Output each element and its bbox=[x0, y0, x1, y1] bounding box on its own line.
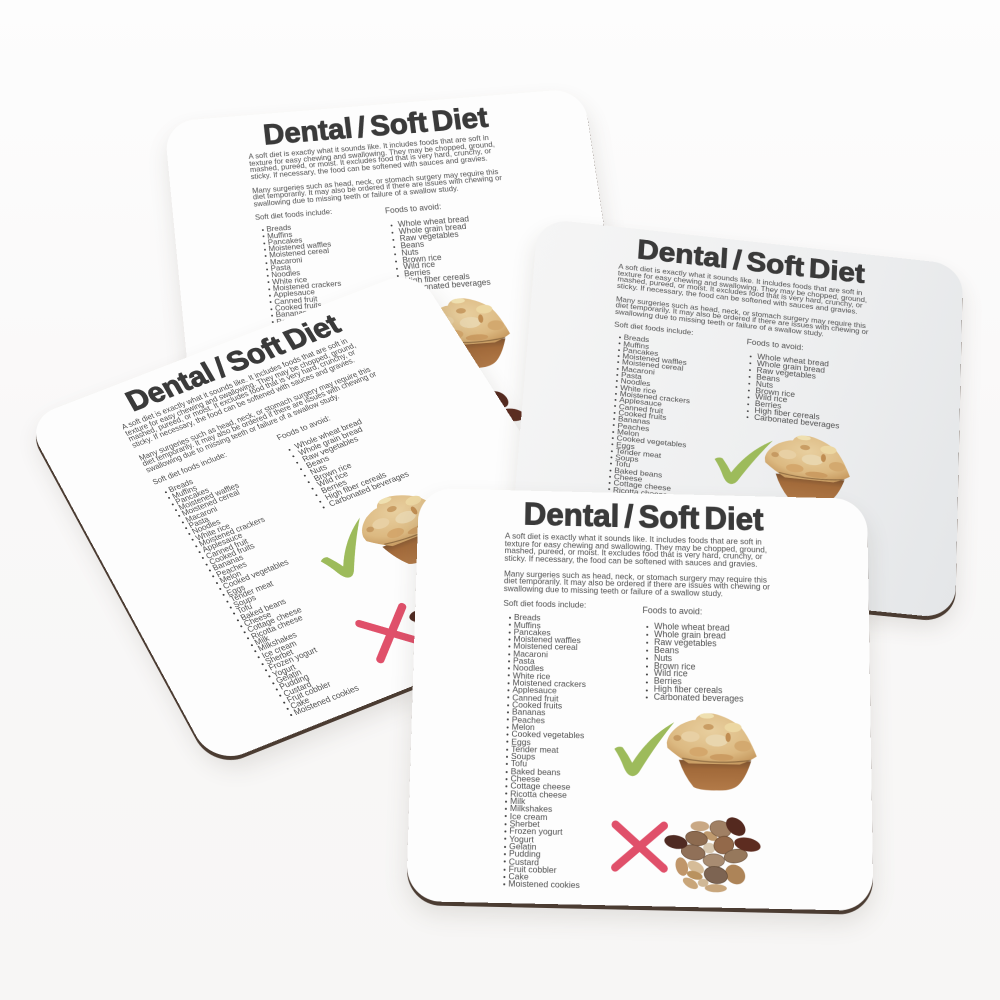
back coaster soft foods list: Cooked fruits bbox=[275, 300, 322, 313]
right coaster soft foods list: Tofu bbox=[615, 459, 631, 469]
icon: muffin bbox=[666, 713, 757, 791]
front coaster soft foods list: Baked beans bbox=[511, 766, 561, 777]
right coaster avoid list: Raw vegetables bbox=[756, 365, 816, 380]
front coaster cork edge bbox=[406, 492, 874, 915]
back coaster soft foods list: Breads bbox=[266, 223, 292, 234]
front coaster soft foods list: Macaroni bbox=[513, 648, 548, 659]
front coaster intro paragraph: sticky. If necessary, the food can be softened with sauces and gravies. bbox=[504, 553, 758, 568]
back coaster soft foods list: Moistened cookies bbox=[292, 462, 360, 476]
front coaster soft foods list: Pudding bbox=[509, 848, 541, 859]
icon: red cross bbox=[381, 400, 440, 451]
icon: green check bbox=[614, 722, 674, 776]
back coaster soft foods list: Pancakes bbox=[267, 235, 303, 247]
left coaster second paragraph: swallowing due to missing teeth or failure of a swallow study. bbox=[144, 391, 341, 474]
front coaster soft foods list: Cooked vegetables bbox=[511, 729, 584, 741]
coaster: back bbox=[163, 101, 610, 476]
left coaster soft foods list: Yogurt bbox=[270, 662, 297, 679]
front coaster soft foods list: Yogurt bbox=[509, 833, 534, 844]
left coaster avoid list: High fiber cereals bbox=[323, 470, 388, 502]
right coaster avoid list: Berries bbox=[755, 399, 782, 411]
front coaster soft foods list: Moistened cookies bbox=[508, 879, 580, 891]
left coaster soft foods list: Ricotta cheese bbox=[249, 612, 304, 641]
right coaster soft foods list: Milk bbox=[612, 491, 628, 502]
left coaster soft foods list: Cooked vegetables bbox=[221, 557, 290, 591]
front coaster soft foods list: Pancakes bbox=[514, 627, 551, 637]
back coaster second paragraph: Many surgeries such as head, neck, or stomach surgery may require this bbox=[252, 167, 499, 195]
right coaster cork edge bbox=[508, 222, 963, 623]
front coaster soft foods list: Cake bbox=[508, 871, 529, 882]
back coaster soft foods list: White rice bbox=[272, 274, 308, 286]
front coaster avoid list: Wild rice bbox=[654, 668, 688, 679]
back coaster soft foods list: Cheese bbox=[282, 369, 310, 380]
left coaster soft foods heading: Soft diet foods include: bbox=[151, 450, 228, 487]
back coaster soft foods list: Ricotta cheese bbox=[283, 380, 337, 393]
right coaster soft foods list: Tender meat bbox=[615, 446, 661, 460]
back coaster soft foods list: Sherbet bbox=[286, 409, 315, 421]
back coaster soft foods list: Custard bbox=[290, 444, 319, 455]
left coaster soft foods list: Moistened waffles bbox=[177, 481, 241, 512]
left coaster second paragraph: Many surgeries such as head, neck, or stomach surgery may require this bbox=[137, 365, 372, 462]
right coaster title: Dental / Soft Diet bbox=[636, 234, 865, 288]
right coaster soft foods list: Frozen yogurt bbox=[610, 517, 662, 531]
back coaster soft foods list: Milk bbox=[284, 390, 299, 400]
front coaster soft foods list: Applesauce bbox=[512, 685, 557, 696]
front coaster soft foods list: Cooked fruits bbox=[512, 699, 562, 711]
front coaster soft foods list: Tofu bbox=[511, 758, 527, 769]
front coaster avoid list: High fiber cereals bbox=[654, 684, 722, 696]
front coaster soft foods list: Cheese bbox=[510, 773, 540, 784]
back coaster intro paragraph: mashed, pureed, or moist. It excludes food that is very hard, crunchy, or bbox=[249, 146, 492, 174]
icon: red cross bbox=[611, 820, 668, 873]
front coaster soft foods list: Bananas bbox=[512, 707, 546, 717]
back coaster soft foods list: Macaroni bbox=[270, 255, 303, 266]
back coaster soft foods list: Cottage cheese bbox=[282, 373, 339, 387]
left coaster soft foods list: Custard bbox=[281, 679, 313, 698]
back coaster avoid list bbox=[390, 214, 491, 293]
front coaster soft foods list: Tender meat bbox=[511, 744, 559, 755]
back coaster avoid list: Raw vegetables bbox=[399, 229, 459, 243]
left coaster soft foods list: Milkshakes bbox=[256, 630, 299, 654]
right coaster avoid list bbox=[746, 352, 840, 431]
front coaster printed face bbox=[406, 488, 874, 911]
front coaster avoid heading: Foods to avoid: bbox=[642, 605, 702, 617]
left coaster soft foods list: Bananas bbox=[211, 553, 245, 573]
coaster: front bbox=[401, 490, 879, 929]
left coaster avoid list: Raw vegetables bbox=[300, 434, 360, 463]
right coaster soft foods list: Pasta bbox=[621, 370, 642, 381]
right coaster avoid heading: Foods to avoid: bbox=[747, 338, 804, 352]
back coaster avoid heading: Foods to avoid: bbox=[385, 202, 442, 215]
front coaster avoid list: Nuts bbox=[654, 652, 672, 663]
left coaster avoid list: Carbonated beverages bbox=[327, 469, 411, 509]
right coaster avoid list: Beans bbox=[756, 372, 780, 383]
front coaster soft foods list: Fruit cobbler bbox=[509, 863, 557, 875]
icon: nuts bbox=[494, 390, 522, 422]
back coaster soft foods list: Moistened crackers bbox=[272, 279, 342, 293]
front coaster avoid list: Carbonated beverages bbox=[654, 692, 743, 704]
back coaster soft foods list: Yogurt bbox=[288, 423, 312, 434]
icon: green check bbox=[372, 309, 434, 363]
right coaster soft foods list: Pancakes bbox=[623, 345, 659, 358]
front coaster soft foods list: Milk bbox=[510, 796, 525, 806]
back coaster soft foods list: Tender meat bbox=[279, 340, 324, 353]
right coaster soft foods list: Milkshakes bbox=[612, 498, 653, 511]
right coaster avoid list: Whole grain bread bbox=[757, 359, 825, 374]
back coaster avoid list: Nuts bbox=[401, 247, 419, 257]
front coaster soft foods list: Milkshakes bbox=[510, 803, 552, 814]
left coaster avoid list: Berries bbox=[319, 478, 349, 496]
back coaster intro paragraph: texture for easy chewing and swallowing. They may be chopped, ground, bbox=[249, 139, 495, 167]
left coaster soft foods list: Eggs bbox=[225, 582, 247, 597]
right coaster intro paragraph: texture for easy chewing and swallowing. They may be chopped, ground, bbox=[618, 268, 867, 304]
left coaster avoid list: Whole grain bread bbox=[296, 424, 364, 457]
left coaster soft foods list: Noodles bbox=[190, 517, 222, 536]
back coaster soft foods list: Moistened cereal bbox=[269, 246, 329, 260]
right coaster soft foods list: Breads bbox=[623, 333, 650, 344]
back coaster title: Dental / Soft Diet bbox=[262, 101, 490, 150]
left coaster soft foods list: White rice bbox=[194, 521, 232, 542]
icon: red cross bbox=[355, 602, 414, 664]
right coaster soft foods list: Muffins bbox=[623, 339, 649, 350]
back coaster soft foods list: Pasta bbox=[270, 262, 291, 273]
back coaster printed face bbox=[164, 88, 640, 495]
right coaster soft foods list: Macaroni bbox=[621, 364, 655, 376]
right coaster intro paragraph: sticky. If necessary, the food can be softened with sauces and gravies. bbox=[617, 281, 858, 315]
right coaster soft foods list: Eggs bbox=[616, 440, 635, 451]
back coaster soft foods list: Pudding bbox=[289, 437, 320, 448]
right coaster soft foods list: Moistened waffles bbox=[622, 352, 687, 367]
left coaster avoid list: Nuts bbox=[308, 462, 329, 476]
back coaster intro paragraph: sticky. If necessary, the food can be softened with sauces and gravies. bbox=[250, 153, 488, 181]
icon: muffin bbox=[441, 298, 510, 368]
left coaster second paragraph: diet temporarily. It may also be ordered if there are issues with chewing or bbox=[140, 370, 378, 468]
left coaster intro paragraph: mashed, pureed, or moist. It excludes food that is very hard, crunchy, or bbox=[127, 348, 357, 443]
back coaster soft foods list: Cake bbox=[291, 458, 311, 469]
right coaster second paragraph: swallowing due to missing teeth or failure of a swallow study. bbox=[615, 307, 824, 338]
back coaster cork edge bbox=[165, 92, 641, 499]
front coaster soft foods list: Peaches bbox=[512, 714, 545, 725]
left coaster soft foods list: Applesauce bbox=[200, 531, 244, 554]
left coaster soft foods list: Baked beans bbox=[238, 596, 288, 622]
left coaster soft foods list: Soups bbox=[232, 593, 258, 610]
left coaster soft foods list: Moistened cereal bbox=[180, 488, 241, 518]
right coaster soft foods list: Noodles bbox=[620, 377, 651, 388]
right coaster soft foods list: Moistened cereal bbox=[622, 358, 684, 373]
front coaster soft foods list bbox=[503, 612, 586, 891]
right coaster soft foods list: Peaches bbox=[617, 421, 650, 433]
right coaster avoid list: Nuts bbox=[756, 379, 773, 389]
coaster: left rotated bbox=[36, 278, 520, 772]
left coaster soft foods list: Muffins bbox=[170, 483, 198, 500]
right coaster soft foods list: Canned fruit bbox=[619, 402, 663, 415]
icon: nuts bbox=[664, 817, 761, 892]
front coaster soft foods list: Cottage cheese bbox=[510, 781, 570, 792]
left coaster soft foods list: Cake bbox=[288, 695, 311, 711]
right coaster avoid list: Brown rice bbox=[755, 386, 795, 398]
back coaster soft foods list: Applesauce bbox=[273, 287, 315, 299]
right coaster avoid list: Carbonated beverages bbox=[754, 413, 840, 431]
front coaster title: Dental / Soft Diet bbox=[523, 496, 764, 537]
right coaster second paragraph: diet temporarily. It may also be ordered if there are issues with chewing or bbox=[615, 301, 869, 336]
front coaster soft foods list: White rice bbox=[513, 670, 550, 681]
front coaster intro paragraph bbox=[504, 531, 767, 568]
back coaster soft foods list: Baked beans bbox=[281, 360, 328, 373]
front coaster second paragraph: swallowing due to missing teeth or failure of a swallow study. bbox=[504, 583, 723, 598]
left coaster avoid list: Brown rice bbox=[312, 460, 353, 483]
front coaster avoid list bbox=[646, 621, 744, 704]
right coaster soft foods list: Cheese bbox=[614, 472, 643, 484]
left coaster printed face bbox=[25, 269, 628, 766]
back coaster second paragraph bbox=[252, 167, 503, 208]
left coaster avoid list: Wild rice bbox=[315, 469, 350, 489]
front coaster soft foods heading: Soft diet foods include: bbox=[503, 598, 586, 610]
icon: nuts bbox=[757, 520, 851, 595]
right coaster avoid list: Whole wheat bread bbox=[757, 352, 829, 368]
front coaster avoid list: Whole grain bread bbox=[654, 629, 726, 640]
back coaster soft foods list: Muffins bbox=[267, 229, 293, 240]
back coaster intro paragraph bbox=[248, 133, 495, 181]
front coaster soft foods list: Breads bbox=[514, 612, 541, 623]
icon: red cross bbox=[707, 520, 763, 570]
icon: muffin bbox=[362, 495, 426, 564]
left coaster soft foods list: Moistened crackers bbox=[197, 515, 267, 548]
right coaster soft foods list: Custard bbox=[609, 544, 638, 555]
front coaster avoid list: Whole wheat bread bbox=[654, 621, 730, 633]
back coaster soft foods list: Bananas bbox=[275, 308, 307, 319]
left coaster soft foods list: Fruit cobbler bbox=[285, 679, 332, 705]
front coaster soft foods list: Soups bbox=[511, 751, 535, 762]
right coaster avoid list: Wild rice bbox=[755, 393, 787, 404]
front coaster avoid list: Raw vegetables bbox=[654, 637, 717, 648]
right coaster intro paragraph bbox=[617, 262, 867, 315]
front coaster soft foods list: Custard bbox=[509, 856, 539, 867]
left coaster soft foods list: Cheese bbox=[242, 609, 273, 628]
left coaster intro paragraph: texture for easy chewing and swallowing. They may be chopped, ground, bbox=[123, 340, 357, 437]
right coaster soft foods list: White rice bbox=[620, 383, 657, 395]
front coaster soft foods list: Gelatin bbox=[509, 841, 536, 852]
back coaster soft foods list: Noodles bbox=[271, 268, 301, 279]
left coaster avoid list: Beans bbox=[304, 453, 331, 470]
left coaster avoid list: Whole wheat bread bbox=[293, 417, 364, 451]
right coaster soft foods heading: Soft diet foods include: bbox=[614, 320, 694, 337]
right coaster intro paragraph: A soft diet is exactly what it sounds like. It includes foods that are soft in bbox=[618, 262, 863, 297]
back coaster soft foods list: Peaches bbox=[276, 315, 308, 326]
left coaster soft foods list: Cottage cheese bbox=[246, 605, 304, 635]
left coaster soft foods list: Milk bbox=[253, 633, 271, 647]
right coaster soft foods list: Cottage cheese bbox=[613, 478, 671, 493]
right coaster soft foods list: Yogurt bbox=[610, 524, 634, 535]
back coaster second paragraph: swallowing due to missing teeth or failure of a swallow study. bbox=[253, 183, 459, 208]
right coaster soft foods list: Soups bbox=[615, 453, 639, 464]
right coaster soft foods list: Fruit cobbler bbox=[608, 550, 655, 564]
right coaster soft foods list: Moistened crackers bbox=[620, 389, 690, 405]
left coaster soft foods list: Pancakes bbox=[173, 485, 211, 506]
front coaster soft foods list: Muffins bbox=[514, 619, 541, 630]
back coaster soft foods list: Canned fruit bbox=[274, 294, 318, 306]
right coaster soft foods list: Baked beans bbox=[614, 465, 662, 479]
right coaster soft foods list bbox=[607, 333, 690, 579]
front coaster soft foods list: Pasta bbox=[513, 656, 535, 666]
left coaster soft foods list: Macaroni bbox=[184, 504, 219, 524]
back coaster soft foods list: Tofu bbox=[280, 356, 296, 366]
front coaster second paragraph: Many surgeries such as head, neck, or stomach surgery may require this bbox=[504, 568, 767, 584]
left coaster title: Dental / Soft Diet bbox=[120, 308, 346, 417]
front coaster soft foods list: Ricotta cheese bbox=[510, 788, 567, 800]
front coaster intro paragraph: A soft diet is exactly what it sounds like. It includes foods that are soft in bbox=[505, 531, 762, 547]
back coaster avoid list: Brown rice bbox=[402, 252, 442, 264]
left coaster soft foods list: Sherbet bbox=[263, 647, 295, 666]
right coaster soft foods list: Cooked vegetables bbox=[616, 433, 687, 449]
left coaster soft foods list: Tender meat bbox=[228, 578, 275, 603]
icon: green check bbox=[714, 440, 773, 484]
right coaster soft foods list: Bananas bbox=[618, 414, 650, 426]
back coaster soft foods heading: Soft diet foods include: bbox=[255, 207, 333, 222]
front coaster soft foods list: Ice cream bbox=[510, 811, 548, 822]
right coaster second paragraph: Many surgeries such as head, neck, or stomach surgery may require this bbox=[616, 294, 866, 330]
left coaster soft foods list: Gelatin bbox=[274, 667, 303, 685]
back coaster soft foods list bbox=[262, 223, 360, 476]
left coaster soft foods list: Melon bbox=[218, 568, 243, 585]
right coaster soft foods list: Moistened cookies bbox=[607, 563, 676, 579]
right coaster printed face bbox=[508, 218, 963, 619]
left coaster avoid heading: Foods to avoid: bbox=[275, 414, 332, 442]
right coaster soft foods list: Cake bbox=[608, 557, 628, 568]
front coaster avoid list: Beans bbox=[654, 645, 679, 655]
front coaster avoid list: Brown rice bbox=[654, 660, 696, 671]
icon: muffin bbox=[764, 435, 850, 498]
left coaster soft foods list: Peaches bbox=[214, 559, 248, 579]
front coaster soft foods list: Moistened crackers bbox=[512, 677, 586, 689]
left coaster soft foods list: Pudding bbox=[278, 672, 311, 692]
back coaster avoid list: Berries bbox=[404, 268, 431, 279]
left coaster soft foods list: Breads bbox=[167, 477, 195, 494]
front coaster intro paragraph: mashed, pureed, or moist. It excludes food that is very hard, crunchy, or bbox=[504, 545, 763, 561]
front coaster soft foods list: Frozen yogurt bbox=[509, 826, 563, 837]
left coaster intro paragraph: A soft diet is exactly what it sounds like. It includes foods that are soft in bbox=[120, 336, 349, 431]
front coaster second paragraph bbox=[504, 568, 770, 598]
back coaster avoid list: Wild rice bbox=[403, 260, 436, 271]
left coaster soft foods list: Pasta bbox=[187, 514, 211, 530]
back coaster soft foods list: Soups bbox=[280, 349, 303, 359]
front coaster soft foods list: Moistened waffles bbox=[513, 634, 581, 645]
back coaster soft foods list: Cooked vegetables bbox=[277, 325, 346, 339]
right coaster intro paragraph: mashed, pureed, or moist. It excludes food that is very hard, crunchy, or bbox=[617, 275, 863, 310]
left coaster intro paragraph: sticky. If necessary, the food can be softened with sauces and gravies. bbox=[130, 355, 356, 449]
back coaster avoid list: Beans bbox=[400, 239, 425, 250]
front coaster soft foods list: Sherbet bbox=[510, 818, 540, 829]
back coaster soft foods list: Gelatin bbox=[288, 430, 315, 441]
right coaster soft foods list: Applesauce bbox=[619, 395, 662, 408]
left coaster soft foods list: Tofu bbox=[235, 602, 254, 616]
back coaster avoid list: Whole grain bread bbox=[398, 221, 467, 236]
front coaster intro paragraph: texture for easy chewing and swallowing. They may be chopped, ground, bbox=[505, 538, 767, 554]
right coaster soft foods list: Pudding bbox=[609, 537, 640, 549]
back coaster soft foods list: Eggs bbox=[278, 336, 297, 346]
front coaster soft foods list: Melon bbox=[512, 721, 535, 732]
left coaster soft foods list bbox=[164, 477, 361, 717]
left coaster soft foods list: Canned fruit bbox=[204, 536, 249, 560]
coaster: right bbox=[510, 222, 968, 632]
back coaster avoid list: Carbonated beverages bbox=[405, 278, 491, 293]
left coaster avoid list bbox=[288, 417, 411, 509]
back coaster soft foods list: Fruit cobbler bbox=[291, 449, 336, 462]
front coaster soft foods list: Eggs bbox=[511, 736, 531, 747]
front coaster soft foods list: Canned fruit bbox=[512, 692, 559, 703]
right coaster soft foods list: Sherbet bbox=[611, 511, 640, 523]
icon: green check bbox=[320, 518, 360, 578]
back coaster soft foods list: Moistened waffles bbox=[268, 239, 332, 253]
right coaster soft foods list: Cooked fruits bbox=[618, 408, 667, 422]
back coaster avoid list: High fiber cereals bbox=[404, 272, 470, 286]
left coaster soft foods list: Moistened cookies bbox=[292, 683, 361, 717]
right coaster soft foods list: Gelatin bbox=[610, 530, 636, 542]
back coaster intro paragraph: A soft diet is exactly what it sounds like. It includes foods that are soft in bbox=[248, 133, 489, 161]
icon: nuts bbox=[409, 610, 415, 622]
right coaster soft foods list: Ice cream bbox=[611, 504, 648, 517]
front coaster soft foods list: Noodles bbox=[513, 663, 544, 673]
back coaster soft foods list: Ice cream bbox=[285, 402, 322, 414]
back coaster soft foods list: Melon bbox=[277, 322, 299, 333]
back coaster avoid list: Whole wheat bread bbox=[397, 214, 470, 228]
right coaster avoid list: High fiber cereals bbox=[754, 406, 820, 422]
left coaster soft foods list: Cooked fruits bbox=[207, 541, 256, 567]
front coaster avoid list: Berries bbox=[654, 676, 682, 687]
right coaster soft foods list: Ricotta cheese bbox=[613, 485, 668, 499]
front coaster second paragraph: diet temporarily. It may also be ordered if there are issues with chewing or bbox=[504, 576, 770, 592]
left coaster cork edge bbox=[25, 273, 628, 770]
back coaster soft foods list: Frozen yogurt bbox=[287, 415, 337, 427]
front coaster soft foods list: Moistened cereal bbox=[513, 641, 578, 652]
back coaster second paragraph: diet temporarily. It may also be ordered if there are issues with chewing or bbox=[252, 173, 503, 202]
right coaster soft foods list: Melon bbox=[617, 427, 640, 438]
left coaster soft foods list: Ice cream bbox=[260, 638, 298, 660]
back coaster soft foods list: Milkshakes bbox=[285, 395, 325, 407]
left coaster soft foods list: Frozen yogurt bbox=[267, 645, 319, 673]
